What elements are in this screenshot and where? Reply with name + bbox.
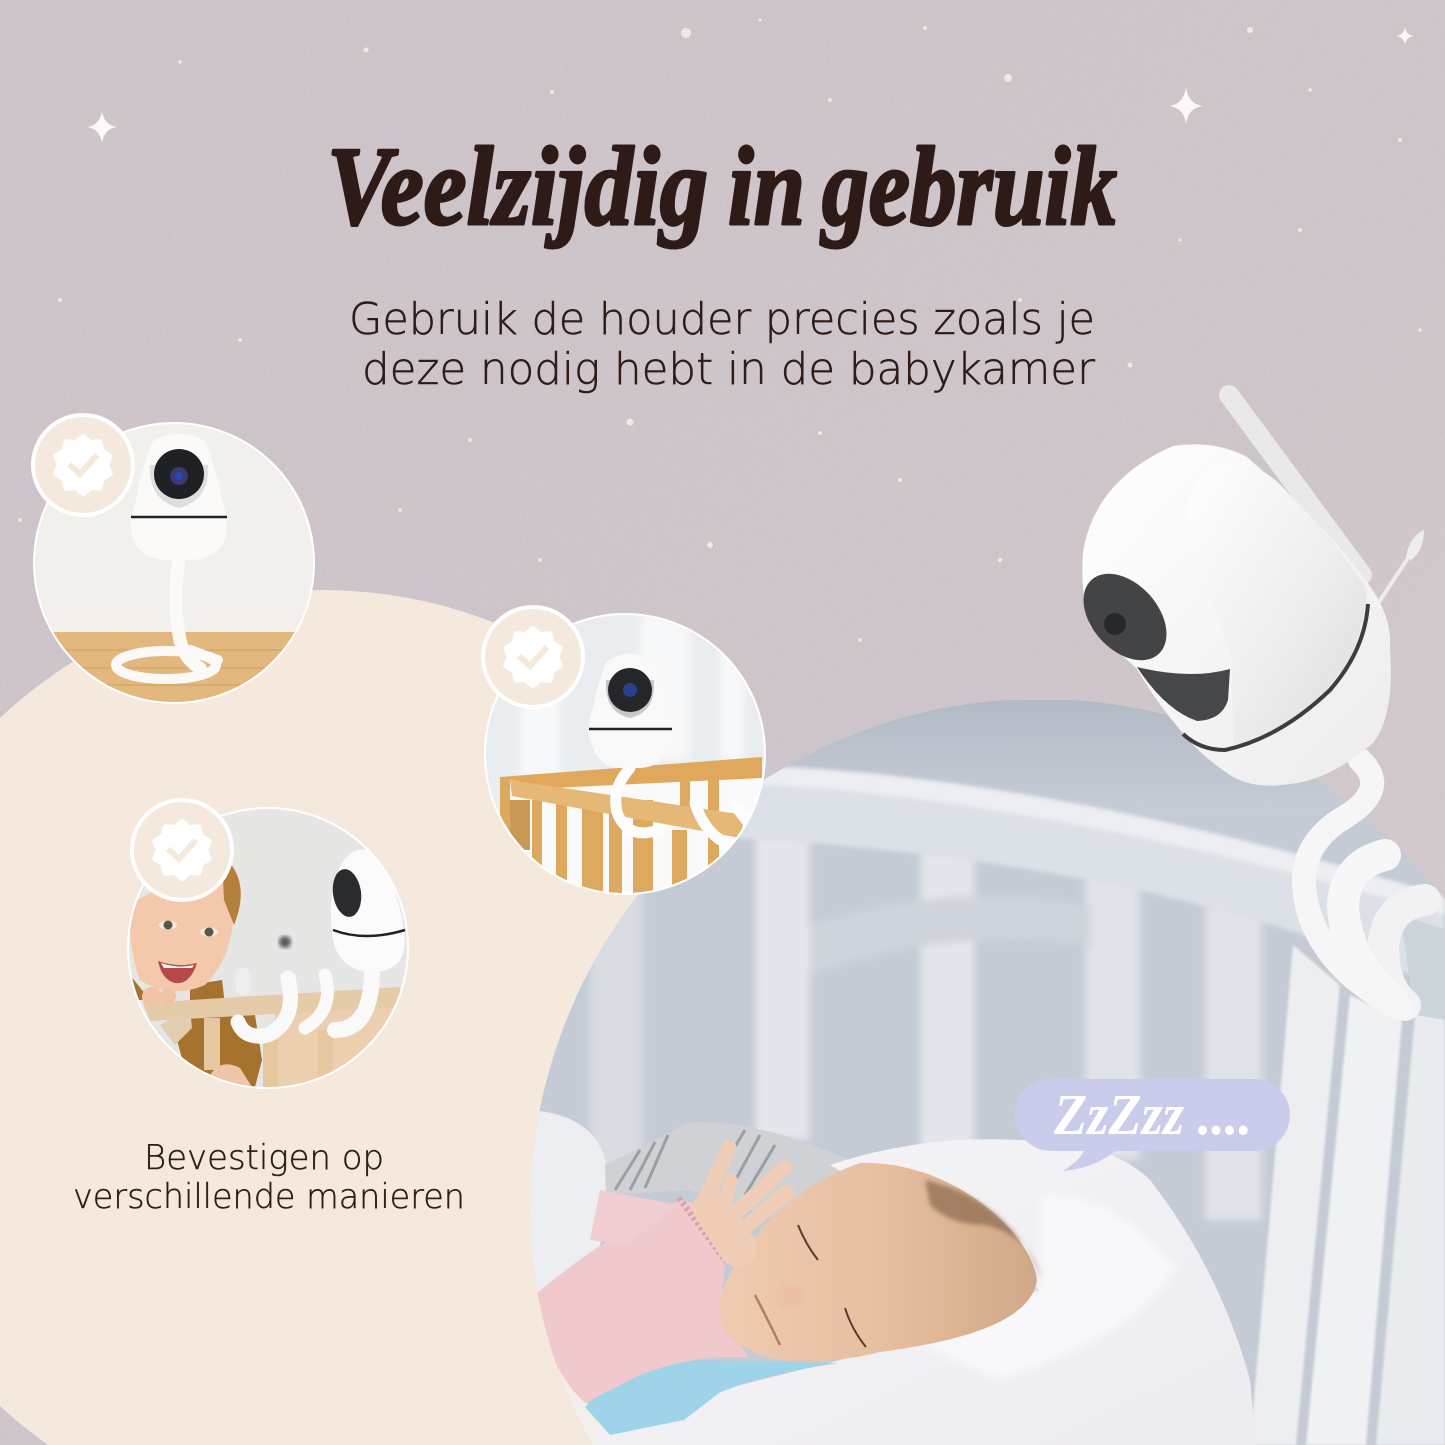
baby hair bbox=[925, 1180, 1042, 1280]
cream background shape bbox=[0, 590, 792, 1445]
title: in bbox=[728, 125, 805, 249]
title: gebruik bbox=[820, 125, 1117, 249]
bubble text: ZzZzz .... bbox=[1053, 1082, 1252, 1147]
subtitle: deze nodig hebt in de babykamer bbox=[362, 344, 1096, 395]
photo: crib rail bbox=[484, 613, 766, 895]
camera body bbox=[1082, 444, 1391, 786]
fuzzy white blanket corner bbox=[557, 1366, 600, 1445]
photo: smiling baby with camera bbox=[127, 807, 409, 1090]
blue blanket bbox=[585, 1360, 838, 1435]
baby face features bbox=[755, 1225, 866, 1347]
badge: check 2 bbox=[483, 607, 583, 707]
face bbox=[130, 880, 233, 991]
top crib rail bbox=[738, 784, 1445, 975]
rail bbox=[143, 987, 400, 1021]
badge: check 3 bbox=[132, 800, 232, 900]
speech bubble bbox=[1015, 1079, 1290, 1171]
striped cloth bbox=[605, 1122, 850, 1220]
stand bbox=[116, 560, 218, 679]
rail end bbox=[1400, 915, 1445, 1020]
slats bbox=[204, 1018, 333, 1090]
caption bbox=[73, 1138, 465, 1217]
sweater bbox=[170, 1015, 262, 1087]
foreground crib slats bbox=[1250, 945, 1445, 1445]
baby hand bbox=[705, 1148, 787, 1248]
dark lens bbox=[1067, 558, 1183, 676]
subtitle: Gebruik de houder precies zoals je bbox=[349, 294, 1095, 345]
baby nose bbox=[775, 1284, 805, 1308]
flexible holder coils bbox=[1304, 760, 1425, 1008]
photo: table stand bbox=[33, 422, 315, 704]
camera bbox=[588, 654, 660, 768]
sparkle star centre right bbox=[1169, 87, 1203, 124]
camera shell bbox=[1187, 461, 1367, 748]
camera bbox=[331, 849, 405, 972]
front rail bbox=[510, 780, 745, 838]
caption: Bevestigen op bbox=[144, 1138, 384, 1178]
back rail bbox=[500, 757, 762, 788]
nest pillow bbox=[595, 1139, 1256, 1445]
blurred crib slats bbox=[590, 830, 1262, 1220]
subtitle bbox=[349, 294, 1096, 395]
caption: verschillende manieren bbox=[73, 1177, 465, 1217]
lens eye bbox=[1104, 613, 1126, 635]
sparkle star left bbox=[87, 111, 117, 143]
panel: nursery photo bbox=[530, 700, 1445, 1445]
white behind slats bbox=[510, 778, 762, 893]
folded blanket left bbox=[530, 1111, 606, 1292]
title bbox=[327, 125, 1117, 249]
title: Veelzijdig bbox=[327, 125, 708, 249]
top shadow band of the crib bbox=[811, 700, 1202, 754]
lower dark sensor bbox=[1137, 667, 1230, 721]
lower crib bbox=[275, 1005, 395, 1087]
black seam line bbox=[1183, 604, 1368, 750]
sparkle star top right bbox=[1396, 27, 1414, 45]
antennas bbox=[1229, 395, 1424, 605]
slats bbox=[500, 777, 719, 895]
hooks bbox=[238, 970, 372, 1036]
badge: check 1 bbox=[33, 415, 133, 515]
baby head bbox=[719, 1163, 1037, 1362]
camera bbox=[131, 434, 227, 560]
pink sweater bbox=[537, 1200, 749, 1403]
hooks bbox=[616, 768, 750, 845]
main camera with flexible holder bbox=[1067, 395, 1425, 1008]
